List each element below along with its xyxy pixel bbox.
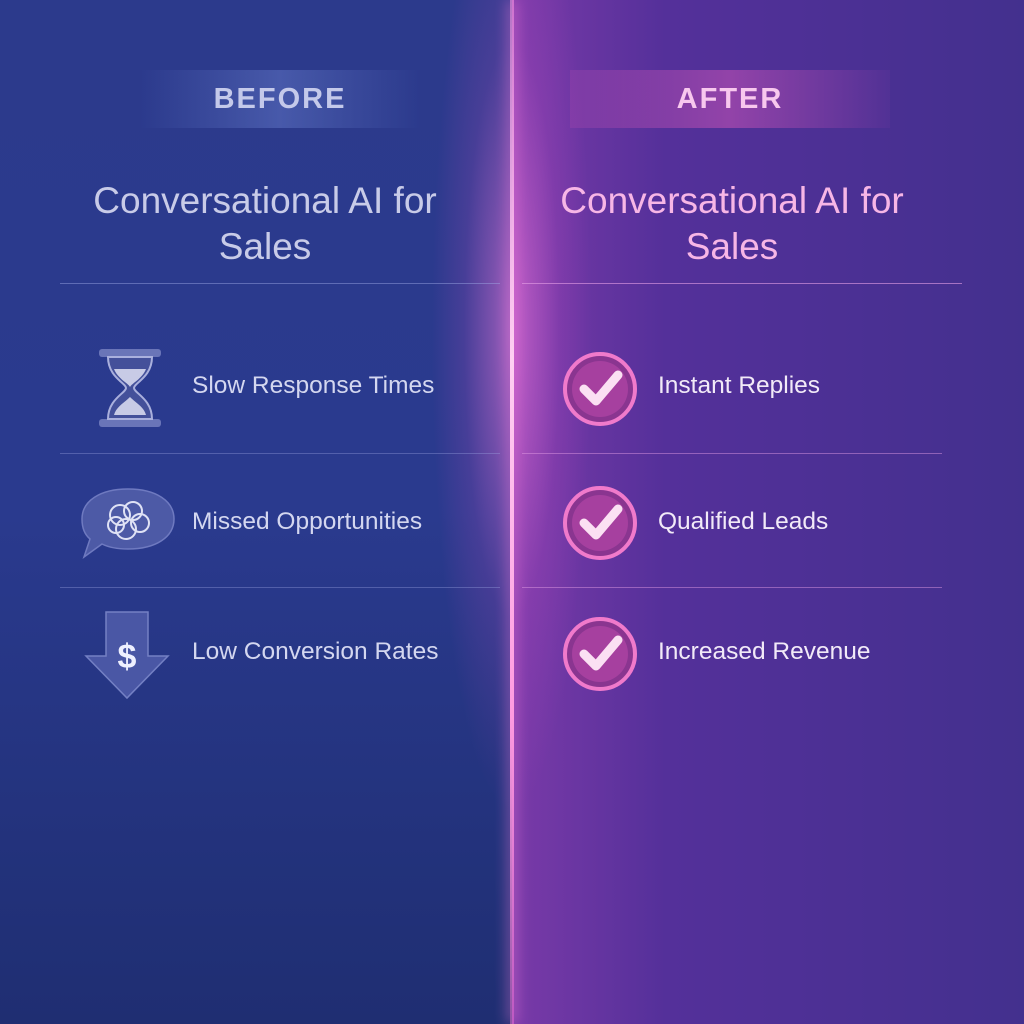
icon: down arrow dollar: $ bbox=[118, 638, 137, 676]
after title bbox=[560, 180, 904, 267]
before banner: BEFORE bbox=[214, 83, 346, 115]
after title: Sales bbox=[686, 226, 778, 267]
icon: check 2 bbox=[563, 486, 637, 560]
text: low conversion: Low Conversion Rates bbox=[192, 638, 438, 665]
before title bbox=[93, 180, 437, 267]
text: qualified leads: Qualified Leads bbox=[658, 508, 828, 535]
before banner bbox=[140, 70, 420, 128]
before title: Conversational AI for bbox=[93, 180, 437, 221]
before title: Sales bbox=[219, 226, 311, 267]
center glow divider bbox=[432, 0, 592, 1024]
icon: hourglass bbox=[99, 349, 161, 427]
after title: Conversational AI for bbox=[560, 180, 904, 221]
after banner: AFTER bbox=[677, 83, 783, 115]
text: instant replies: Instant Replies bbox=[658, 372, 820, 399]
text: missed opportunities: Missed Opportunities bbox=[192, 508, 422, 535]
after banner bbox=[570, 70, 890, 128]
icon: check 1 bbox=[563, 352, 637, 426]
icon: down arrow dollar bbox=[84, 611, 170, 699]
text: increased revenue: Increased Revenue bbox=[658, 638, 870, 665]
icon: speech bubble bbox=[81, 488, 175, 559]
icon: check 3 bbox=[563, 617, 637, 691]
text: slow response: Slow Response Times bbox=[192, 372, 434, 399]
